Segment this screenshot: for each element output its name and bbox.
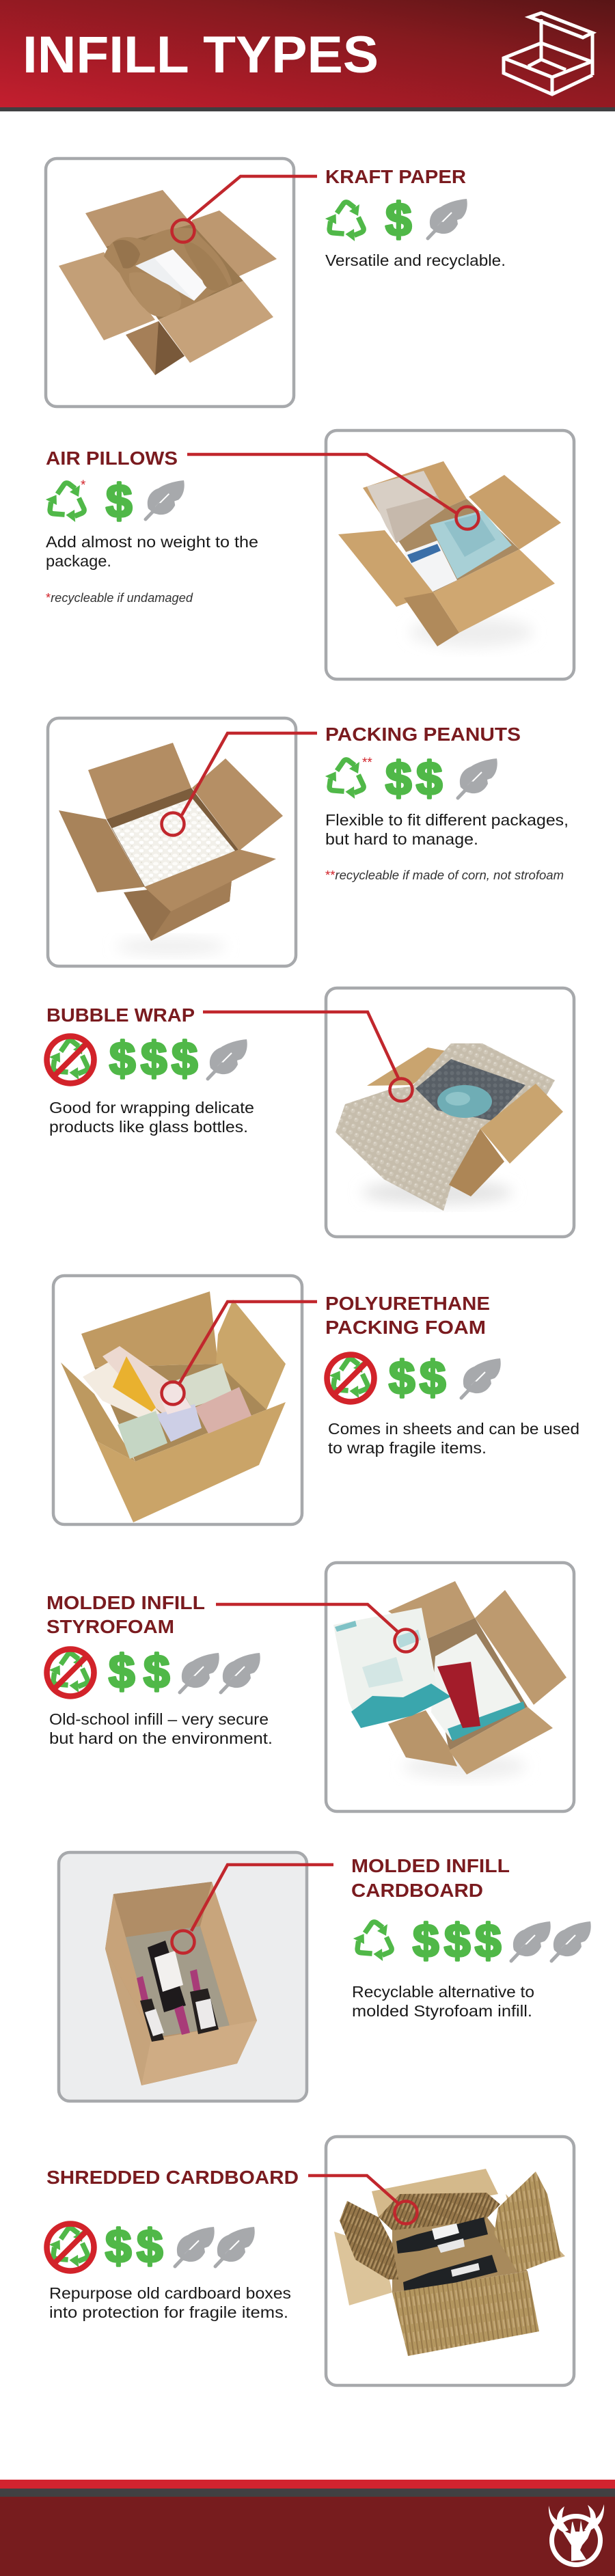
heading bbox=[351, 1855, 510, 1901]
description bbox=[49, 1710, 273, 1747]
icon: recyclable with footnote bbox=[44, 478, 88, 523]
description: Add almost no weight to the bbox=[46, 533, 258, 551]
icon: one feather bbox=[428, 199, 467, 238]
description: but hard on the environment. bbox=[49, 1729, 273, 1747]
icon: one feather bbox=[458, 758, 497, 798]
icon: one feather bbox=[146, 480, 184, 519]
section: polyurethane packing foam bbox=[53, 1276, 579, 1524]
icon: recyclable bbox=[323, 202, 368, 243]
description: into protection for fragile items. bbox=[49, 2303, 288, 2321]
footer band bbox=[0, 2480, 615, 2576]
footnote: **recycleable if made of corn, not strofoam bbox=[325, 868, 564, 882]
callout leader bbox=[216, 1604, 417, 1652]
icon: one feather bbox=[461, 1358, 501, 1398]
heading: KRAFT PAPER bbox=[325, 166, 466, 187]
description: but hard to manage. bbox=[325, 830, 478, 848]
description: Repurpose old cardboard boxes bbox=[49, 2284, 291, 2302]
icon: not recyclable bbox=[46, 2223, 94, 2271]
heading: STYROFOAM bbox=[46, 1616, 174, 1637]
icon: one dollar: $ bbox=[106, 475, 132, 527]
callout leader bbox=[308, 2176, 417, 2223]
icon: two dollars: $$ bbox=[109, 1645, 169, 1698]
description: products like glass bottles. bbox=[49, 1118, 248, 1136]
description: Flexible to fit different packages, bbox=[325, 811, 569, 829]
heading bbox=[325, 1293, 490, 1338]
callout leader bbox=[172, 1865, 333, 1953]
icon: two feathers bbox=[175, 2227, 255, 2266]
callout leader bbox=[172, 176, 317, 242]
icon: recyclable with footnote: ** bbox=[362, 756, 372, 770]
icon: two feathers bbox=[511, 1921, 591, 1961]
description: to wrap fragile items. bbox=[328, 1439, 487, 1457]
photo panel: packing peanuts box bbox=[48, 718, 296, 966]
description bbox=[49, 2284, 291, 2321]
heading: CARDBOARD bbox=[351, 1880, 483, 1901]
icon: deer logo bbox=[549, 2504, 604, 2565]
icon: not recyclable bbox=[327, 1354, 374, 1402]
section: kraft paper bbox=[46, 159, 506, 407]
title: INFILL TYPES bbox=[23, 26, 379, 84]
description: package. bbox=[46, 552, 111, 570]
description: Comes in sheets and can be used bbox=[328, 1420, 579, 1438]
icon: recyclable with footnote bbox=[323, 756, 372, 800]
heading bbox=[46, 1592, 205, 1637]
heading: MOLDED INFILL bbox=[351, 1855, 510, 1876]
icon: open box outline bbox=[504, 13, 592, 94]
icon: recyclable with footnote: * bbox=[81, 478, 86, 493]
description: Old-school infill – very secure bbox=[49, 1710, 269, 1728]
description: Versatile and recyclable. bbox=[325, 251, 506, 269]
callout leader bbox=[203, 1012, 413, 1101]
section: molded infill cardboard bbox=[59, 1852, 591, 2101]
section: shredded cardboard bbox=[46, 2137, 574, 2385]
heading: AIR PILLOWS bbox=[46, 448, 178, 469]
description: molded Styrofoam infill. bbox=[352, 2002, 532, 2020]
icon: one feather bbox=[208, 1039, 247, 1079]
description bbox=[325, 811, 569, 848]
icon: two feathers bbox=[180, 1653, 260, 1693]
photo panel: kraft paper box bbox=[46, 159, 294, 407]
photo panel: polyurethane foam box bbox=[53, 1276, 302, 1524]
callout leader bbox=[161, 733, 317, 835]
icon: two dollars: $$ bbox=[385, 752, 442, 805]
icon: recyclable bbox=[351, 1922, 396, 1962]
heading: MOLDED INFILL bbox=[46, 1592, 205, 1613]
icon: three dollars: $$$ bbox=[413, 1915, 501, 1967]
section: bubble wrap bbox=[46, 988, 574, 1237]
bottles bbox=[137, 1941, 219, 2042]
heading: POLYURETHANE bbox=[325, 1293, 490, 1314]
photo panel: molded styrofoam box bbox=[326, 1563, 574, 1811]
icon: not recyclable bbox=[46, 1036, 94, 1084]
photo panel: air pillows box bbox=[326, 430, 574, 679]
description bbox=[328, 1420, 579, 1457]
icon: one dollar: $ bbox=[385, 193, 411, 246]
photo panel: bubble wrap box bbox=[326, 988, 574, 1237]
description bbox=[352, 1983, 534, 2020]
heading: PACKING PEANUTS bbox=[325, 724, 521, 745]
callout leader bbox=[161, 1302, 317, 1405]
header banner bbox=[0, 0, 615, 111]
section: packing peanuts bbox=[48, 718, 569, 966]
description bbox=[49, 1099, 254, 1136]
bottles bbox=[396, 2217, 497, 2294]
heading: PACKING FOAM bbox=[325, 1317, 486, 1338]
description bbox=[46, 533, 258, 570]
heading: BUBBLE WRAP bbox=[46, 1004, 195, 1026]
icon: three dollars: $$$ bbox=[109, 1032, 197, 1085]
icon: two dollars: $$ bbox=[389, 1352, 446, 1404]
photo panel: molded cardboard box with wine bbox=[59, 1852, 307, 2101]
photo panel: shredded cardboard box bbox=[326, 2137, 574, 2385]
section: air pillows bbox=[44, 430, 574, 679]
heading: SHREDDED CARDBOARD bbox=[46, 2167, 299, 2188]
description: Recyclable alternative to bbox=[352, 1983, 534, 2001]
icon: not recyclable bbox=[46, 1649, 94, 1696]
section: molded infill styrofoam bbox=[46, 1563, 574, 1811]
callout leader bbox=[187, 454, 478, 529]
footnote: *recycleable if undamaged bbox=[46, 590, 193, 605]
description: Good for wrapping delicate bbox=[49, 1099, 254, 1116]
icon: two dollars: $$ bbox=[105, 2220, 163, 2273]
